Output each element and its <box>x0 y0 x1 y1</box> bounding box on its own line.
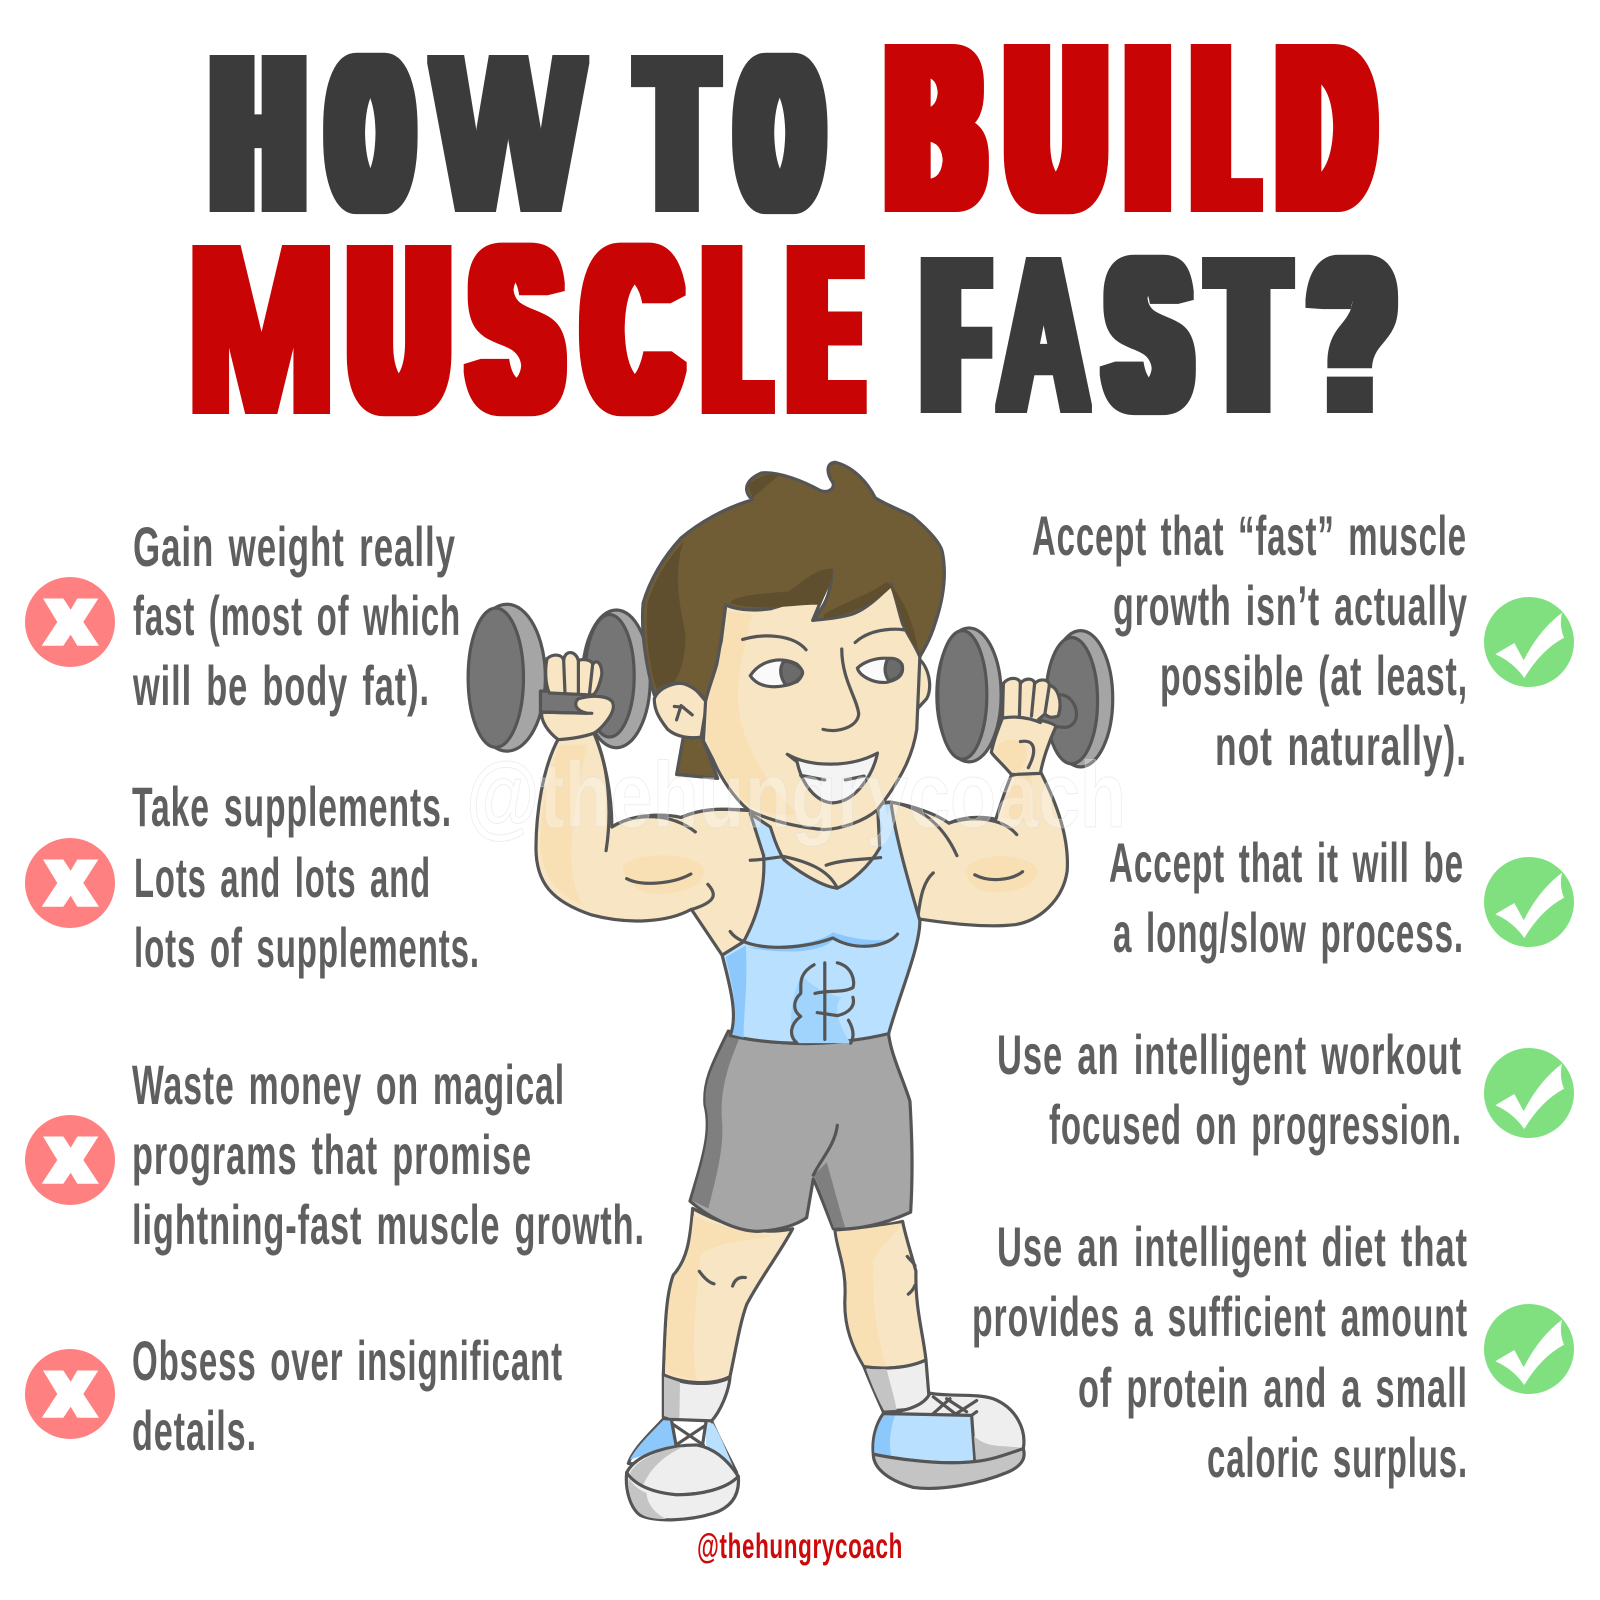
watermark: @thehungrycoach: @thehungrycoach <box>466 743 1126 847</box>
face <box>703 572 920 830</box>
title line two: MUSCLE FAST?: E <box>794 198 856 460</box>
text: supplements: Take supplements. <box>132 775 452 838</box>
item 4 <box>972 1215 1574 1489</box>
chest and ab lines <box>730 856 898 947</box>
left dumbbell <box>468 604 650 751</box>
title line one: HOW TO BUILD: B <box>890 0 981 258</box>
text: insignificant details <box>132 1329 563 1462</box>
text: magical programs: Waste money on magical <box>132 1053 565 1116</box>
text: gain weight: will be body fat). <box>132 654 430 717</box>
text: supplements: lots of supplements. <box>134 916 480 979</box>
tank top <box>722 802 920 1043</box>
title line one: HOW TO BUILD: L <box>1199 0 1252 258</box>
left ear <box>654 683 707 738</box>
eyes <box>750 658 903 687</box>
text: supplements: Lots and lots and <box>134 846 431 909</box>
item 3 <box>997 1023 1574 1156</box>
text: accept fast <box>1032 504 1468 777</box>
mouth <box>787 753 877 803</box>
item 2 <box>25 775 480 979</box>
text: intelligent diet <box>972 1215 1468 1489</box>
icon: red x <box>25 838 115 928</box>
text: gain weight: fast (most of which <box>133 584 461 647</box>
icon: green check <box>1484 597 1574 687</box>
icon: red x <box>25 577 115 667</box>
text: supplements <box>132 775 480 979</box>
text: magical programs: lightning-fast muscle growth. <box>132 1193 645 1256</box>
title line one: HOW TO BUILD: H <box>216 11 300 254</box>
right ear <box>915 657 930 711</box>
left leg <box>663 1208 793 1383</box>
back hair <box>677 735 718 778</box>
arm muscle lines <box>594 733 748 909</box>
right dumbbell <box>937 628 1113 767</box>
left dumbbell plates and handle <box>582 610 650 748</box>
title line one: HOW TO BUILD: I <box>1130 0 1166 258</box>
title line two: MUSCLE FAST?: T <box>1215 215 1282 456</box>
right shoe <box>873 1414 975 1463</box>
right column: things to do <box>972 504 1574 1489</box>
left sock <box>663 1375 730 1423</box>
item 4 <box>25 1329 563 1462</box>
title line one: HOW TO BUILD: W <box>434 14 583 255</box>
title line two: MUSCLE FAST?: S <box>474 198 558 460</box>
left shoe <box>628 1419 737 1473</box>
text: magical programs: programs that promise <box>132 1123 532 1186</box>
title line one: HOW TO BUILD: D <box>1281 0 1370 258</box>
title line two: MUSCLE FAST?: U <box>353 198 445 460</box>
title line two: MUSCLE FAST?: M <box>188 198 335 460</box>
text: insignificant details: details. <box>132 1399 257 1462</box>
title <box>188 0 1391 460</box>
title line two: MUSCLE FAST?: S <box>1110 215 1186 455</box>
upper body <box>468 462 1113 1043</box>
title line one: HOW TO BUILD: T <box>644 13 710 255</box>
icon: green check <box>1484 1048 1574 1138</box>
credit: @thehungrycoach: @thehungrycoach <box>697 1527 903 1566</box>
right dumbbell plates and handle <box>1048 631 1113 767</box>
face shading <box>707 611 797 815</box>
title line two: MUSCLE FAST?: L <box>710 200 764 460</box>
shorts <box>690 1031 912 1231</box>
item 3 <box>25 1053 645 1256</box>
icon: red x <box>25 1115 115 1205</box>
left column: things to avoid <box>25 515 645 1462</box>
left hand <box>542 653 613 740</box>
item 1 <box>1032 504 1574 777</box>
arm shading <box>623 855 704 894</box>
hair <box>643 462 944 701</box>
icon: green check <box>1484 1304 1574 1394</box>
text: insignificant details: Obsess over insignificant <box>132 1329 563 1392</box>
icon: red x <box>25 1349 115 1439</box>
text: gain weight: Gain weight really <box>133 515 456 578</box>
eyebrows and nose <box>743 629 904 731</box>
item 1 <box>25 515 461 717</box>
lower body <box>626 1031 1024 1520</box>
title line two: MUSCLE FAST?: A <box>999 215 1088 456</box>
title line one: HOW TO BUILD: O <box>333 13 408 255</box>
title line two: MUSCLE FAST?: C <box>588 198 676 460</box>
illustration: bodybuilder with dumbbells <box>468 462 1113 1520</box>
item 2 <box>1109 831 1574 964</box>
text: long slow process <box>1109 831 1464 964</box>
title line one: HOW TO BUILD: U <box>1010 0 1102 258</box>
title line one: HOW TO BUILD: O <box>742 12 818 254</box>
text: intelligent workout <box>997 1023 1462 1156</box>
title line two: MUSCLE FAST? <box>188 198 1391 460</box>
title line two: MUSCLE FAST?: ? <box>1314 216 1391 455</box>
right leg <box>835 1221 926 1368</box>
right hand <box>991 678 1060 775</box>
right sock <box>864 1360 929 1412</box>
arms and torso skin <box>536 733 1067 955</box>
title line one: HOW TO BUILD <box>216 0 1370 258</box>
text: gain weight <box>132 515 461 717</box>
text: magical programs <box>132 1053 645 1256</box>
title line two: MUSCLE FAST?: F <box>929 214 983 455</box>
icon: green check <box>1484 857 1574 947</box>
